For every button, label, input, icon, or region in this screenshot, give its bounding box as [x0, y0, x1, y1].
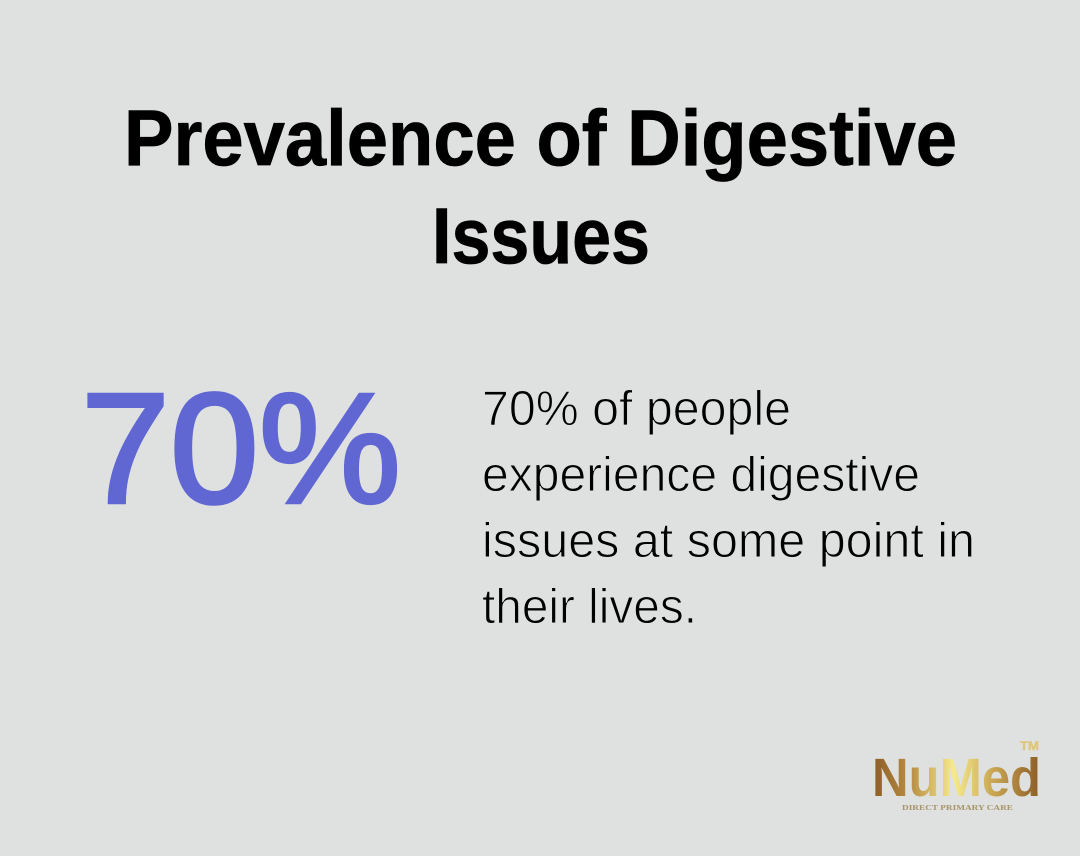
statistic: 70%: 70% [81, 362, 401, 536]
description text: experience digestive [482, 448, 920, 502]
description text: issues at some point in [482, 514, 975, 568]
title: Prevalence of Digestive [124, 93, 957, 182]
description text: their lives. [482, 580, 697, 634]
logo: NuMed: DIRECT PRIMARY CARE [902, 803, 1013, 812]
logo: NuMed: TM [1020, 739, 1039, 753]
description text [482, 382, 975, 634]
logo: NuMed: NuMed [872, 748, 1041, 808]
description text: 70% of people [482, 382, 791, 436]
title [124, 93, 957, 280]
title: Issues [432, 191, 650, 280]
